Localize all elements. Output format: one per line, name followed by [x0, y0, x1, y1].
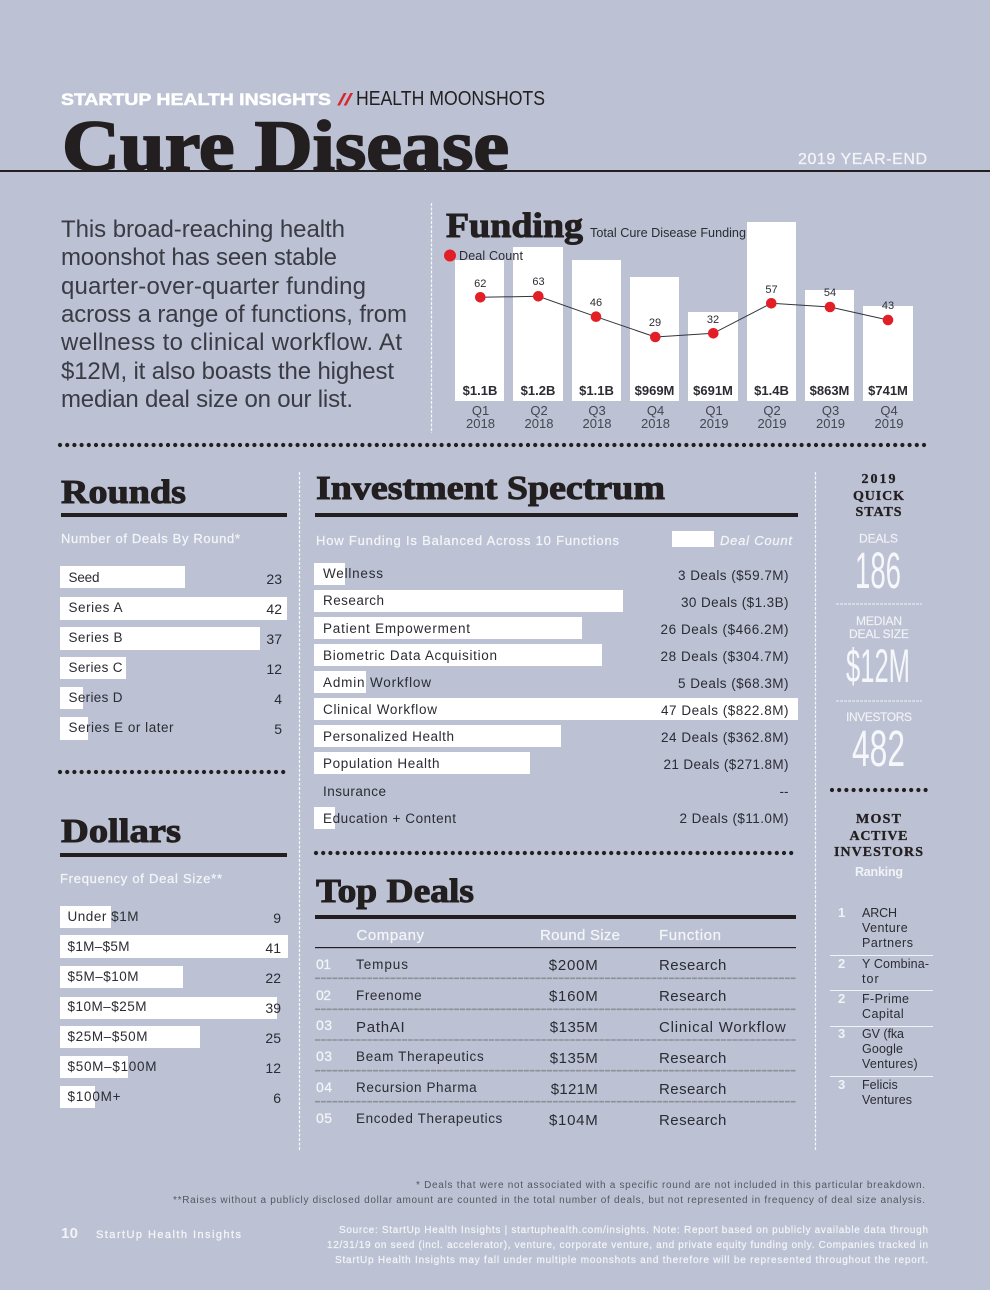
bar: $100m+: [60, 1086, 281, 1108]
quarter axis: 2019: [875, 416, 903, 431]
investor 2: tor: [862, 972, 879, 986]
header: [61, 88, 927, 186]
row: education + content: Education + Content: [323, 811, 456, 826]
deal count labels: 62: [474, 278, 486, 290]
deal count labels: 57: [765, 284, 778, 296]
rounds heading: Rounds: [61, 474, 186, 511]
row: population health: Population Health: [323, 756, 440, 771]
investor 4: GV (fka: [862, 1027, 904, 1041]
bar: series b: [60, 627, 282, 650]
investors heading: [834, 812, 923, 860]
investor 3: 2: [838, 991, 845, 1006]
legend: deal count: Deal Count: [459, 249, 524, 263]
bar: $100m+: $100M+: [68, 1089, 121, 1104]
row: clinical workflow: Clinical Workflow: [323, 702, 437, 717]
bar: series d: Series D: [68, 690, 123, 705]
funding values: [463, 383, 908, 398]
year label: 2019 YEAR-END: [798, 151, 927, 168]
bar: series a: Series A: [68, 600, 122, 615]
quarter axis: Q3: [588, 403, 606, 418]
stat: median deal size: DEAL SIZE: [849, 627, 909, 641]
intro text: quarter-over-quarter funding: [61, 273, 366, 300]
deal 02: 02: [316, 987, 331, 1003]
quarter axis: 2019: [700, 416, 728, 431]
row: insurance: [323, 784, 788, 799]
bar: series d: 4: [274, 691, 282, 707]
deal 03 beam: [316, 1048, 726, 1067]
investors heading: INVESTORS: [834, 845, 923, 860]
row: population health: 21 Deals ($271.8M): [664, 757, 788, 772]
deal 04: [316, 1079, 726, 1098]
investor 1: [838, 905, 913, 950]
deal 03 beam: $135M: [550, 1050, 598, 1067]
panel: funding: [444, 206, 913, 431]
investor 5: Felicis: [862, 1078, 898, 1092]
row: personalized health: Personalized Health: [323, 729, 454, 744]
footnotes: **Raises without a publicly disclosed dollar amount are counted in the total number of deals, but not represented in frequency of deal size analysis.: [173, 1195, 925, 1206]
quarter axis: 2018: [525, 416, 553, 431]
stat: deals: [855, 532, 901, 599]
quick stats heading: 2019: [862, 472, 896, 487]
table header: Round Size: [540, 927, 620, 944]
row: education + content: 2 Deals ($11.0M): [680, 811, 788, 826]
deal count labels: 46: [590, 297, 602, 309]
investor 2: 2: [838, 956, 845, 971]
bar: $5m-$10m: 22: [265, 970, 281, 986]
top deals heading: Top Deals: [316, 873, 474, 910]
funding values: $969M: [635, 383, 674, 398]
spectrum subtitle: How Funding Is Balanced Across 10 Functions: [316, 533, 620, 548]
funding values: $691M: [693, 383, 733, 398]
deal count labels: [474, 276, 894, 329]
panel: rounds: [60, 474, 287, 740]
deal 03 pathai: [316, 1017, 786, 1036]
deal 03 pathai: 03: [316, 1017, 332, 1033]
bar: seed: 23: [266, 571, 282, 587]
row: education + content: [314, 807, 788, 829]
bar: $10m-$25m: [60, 997, 281, 1019]
intro text: across a range of functions, from: [61, 301, 407, 328]
row: biometric data acquisition: Biometric Data Acquisition: [323, 648, 497, 663]
table header: [356, 927, 721, 944]
quarter axis: Q4: [647, 403, 664, 418]
bar: series c: [60, 657, 282, 679]
bar: $10m-$25m: 39: [265, 1000, 281, 1016]
bar: $50m-$100m: [60, 1056, 281, 1078]
deal count line: [475, 291, 893, 342]
source note: Source: StartUp Health Insights | startuphealth.com/insights. Note: Report based on publicly available data through: [339, 1225, 928, 1236]
panel: most active investors: [830, 812, 933, 1107]
kicker: //: [337, 90, 354, 109]
intro text: This broad-reaching health: [61, 216, 345, 243]
row: wellness: 3 Deals ($59.7M): [678, 568, 788, 583]
deal 03 beam: Beam Therapeutics: [356, 1049, 484, 1064]
kicker: STARTUP HEALTH INSIGHTS: [61, 90, 331, 109]
deal 05: [316, 1110, 726, 1129]
row: admin workflow: 5 Deals ($68.3M): [678, 676, 788, 691]
spectrum legend: Deal Count: [720, 533, 793, 548]
bar: seed: [60, 566, 282, 588]
quarter axis: 2019: [816, 416, 845, 431]
row: patient empowerment: [314, 617, 788, 639]
bar: $1m-$5m: $1M–$5M: [68, 939, 130, 954]
deal 04: $121M: [551, 1081, 598, 1098]
deal 05: Encoded Therapeutics: [356, 1111, 503, 1126]
bar: series b: Series B: [68, 630, 122, 645]
panel: dollars: [60, 813, 288, 1108]
footnotes: * Deals that were not associated with a specific round are not included in this particular breakdown.: [416, 1180, 925, 1191]
intro text: median deal size on our list.: [61, 386, 353, 413]
investor 3: Capital: [862, 1007, 904, 1021]
source note: 12/31/19 on seed (incl. accelerator), venture, corporate venture, and private equity funding only. Companies tracked in: [327, 1240, 928, 1251]
quarter axis: 2018: [583, 416, 611, 431]
row: clinical workflow: 47 Deals ($822.8M): [661, 703, 788, 718]
funding heading: Funding: [446, 206, 584, 245]
stat: investors: [846, 710, 912, 777]
intro text: $12M, it also boasts the highest: [61, 358, 394, 385]
investor 1: Partners: [862, 936, 913, 950]
panel: quick stats: [836, 472, 922, 777]
investor 4: Ventures): [862, 1057, 918, 1071]
deal 04: Research: [659, 1081, 726, 1098]
deal 01: [316, 956, 726, 974]
deal count labels: 54: [824, 287, 836, 299]
deal 01: 01: [316, 956, 331, 972]
deal count labels: 43: [882, 300, 894, 312]
row: wellness: [314, 563, 788, 585]
row: patient empowerment: 26 Deals ($466.2M): [660, 622, 788, 637]
rounds subtitle: Number of Deals By Round*: [61, 531, 240, 546]
investor 3: F-Prime: [862, 992, 909, 1006]
investor 2: Y Combina-: [862, 957, 929, 971]
bar: seed: Seed: [68, 570, 100, 585]
bar: $25m-$50m: 25: [265, 1030, 281, 1046]
quarter axis: 2019: [758, 416, 786, 431]
intro text: [60, 216, 407, 413]
deal 01: Research: [659, 957, 726, 974]
deal 03 pathai: Clinical Workflow: [659, 1019, 786, 1036]
bar: $50m-$100m: $50M–$100M: [68, 1059, 156, 1074]
row: insurance: --: [780, 784, 788, 799]
deal 03 pathai: PathAI: [356, 1019, 405, 1036]
intro text: moonshot has seen stable: [61, 244, 337, 271]
ranking label: Ranking: [855, 865, 903, 879]
bar: series c: Series C: [68, 660, 123, 675]
row: biometric data acquisition: 28 Deals ($304.7M): [660, 649, 788, 664]
investor 4: [838, 1026, 918, 1071]
deal 01: $200M: [549, 957, 598, 974]
table header: Company: [356, 927, 424, 944]
deal 02: [316, 987, 726, 1005]
intro text: wellness to clinical workflow. At: [60, 329, 402, 356]
bar: series e or later: [60, 717, 282, 740]
bar: under $1m: Under $1M: [68, 909, 138, 924]
investor 5: 3: [838, 1077, 845, 1092]
bar: $10m-$25m: $10M–$25M: [68, 999, 146, 1014]
deal 02: $160M: [549, 988, 598, 1005]
row: biometric data acquisition: [314, 644, 788, 666]
stat: median deal size: $12M: [846, 639, 910, 692]
bar: series d: [60, 687, 282, 709]
investor 5: [838, 1077, 912, 1107]
page number: StartUp Health Insights: [96, 1229, 242, 1241]
stat: investors: 482: [852, 720, 905, 777]
stat: deals: 186: [855, 542, 901, 599]
quick stats heading: [853, 472, 904, 520]
bar: $1m-$5m: [60, 935, 288, 958]
deal 04: 04: [316, 1079, 332, 1095]
funding values: $1.4B: [754, 383, 789, 398]
quarter axis: [466, 403, 903, 431]
bar: $5m-$10m: $5M–$10M: [68, 969, 138, 984]
quick stats heading: QUICK: [853, 489, 904, 504]
bar: under $1m: [60, 906, 281, 928]
row: personalized health: 24 Deals ($362.8M): [661, 730, 788, 745]
quarter axis: 2018: [641, 416, 670, 431]
bar: series e or later: Series E or later: [68, 720, 174, 735]
deal 02: Freenome: [356, 988, 422, 1003]
spectrum legend: [672, 531, 793, 548]
quarter axis: 2018: [466, 416, 495, 431]
row: research: 30 Deals ($1.3B): [681, 595, 788, 610]
bar: series b: 37: [266, 631, 282, 647]
bar: series a: 42: [266, 601, 282, 617]
row: admin workflow: [314, 671, 788, 693]
stat: median deal size: [846, 614, 910, 692]
investor 3: [838, 991, 909, 1021]
funding values: $1.2B: [521, 383, 555, 398]
quarter axis: Q1: [472, 403, 489, 418]
deal 02: Research: [659, 988, 726, 1005]
kicker: [61, 88, 545, 110]
deal 05: Research: [659, 1112, 726, 1129]
bar: series c: 12: [266, 661, 282, 677]
bar: $1m-$5m: 41: [265, 940, 281, 956]
funding values: $1.1B: [463, 383, 497, 398]
investor 2: [838, 956, 929, 986]
bar: series e or later: 5: [274, 721, 282, 737]
deal 03 beam: 03: [316, 1048, 332, 1064]
page number: [61, 1225, 242, 1242]
row: research: Research: [323, 593, 384, 608]
quarter axis: Q2: [763, 403, 781, 418]
quarter axis: Q1: [705, 403, 723, 418]
kicker: HEALTH MOONSHOTS: [356, 88, 545, 110]
dollars heading: Dollars: [61, 813, 181, 850]
row: personalized health: [314, 725, 788, 747]
investor 1: 1: [838, 905, 845, 920]
deal 03 pathai: $135M: [550, 1019, 598, 1036]
funding subtitle: Total Cure Disease Funding: [590, 226, 746, 240]
page number: 10: [61, 1225, 78, 1242]
row: research: [314, 590, 788, 612]
source note: [327, 1225, 928, 1266]
row: clinical workflow: [314, 698, 798, 720]
stat: investors: INVESTORS: [846, 710, 912, 724]
investor 4: 3: [838, 1026, 845, 1041]
deal count labels: 63: [532, 276, 545, 288]
bar: $100m+: 6: [273, 1090, 281, 1106]
stat: deals: DEALS: [859, 532, 898, 546]
investor 1: ARCH: [862, 906, 897, 920]
bar: $25m-$50m: [60, 1026, 281, 1048]
quick stats heading: STATS: [856, 505, 902, 520]
row: wellness: Wellness: [323, 566, 383, 581]
deal count labels: 29: [649, 317, 661, 329]
deal 05: 05: [316, 1110, 332, 1126]
investor 5: Ventures: [862, 1093, 912, 1107]
stat: median deal size: MEDIAN: [856, 614, 902, 628]
deal 01: Tempus: [356, 957, 408, 972]
bar: $50m-$100m: 12: [265, 1060, 281, 1076]
footnotes: [173, 1180, 925, 1206]
panel: investment spectrum: [314, 470, 798, 829]
investor 4: Google: [862, 1042, 903, 1056]
quarter axis: Q3: [822, 403, 839, 418]
dollars subtitle: Frequency of Deal Size**: [60, 871, 222, 886]
investors heading: MOST: [856, 812, 902, 827]
bar: $25m-$50m: $25M–$50M: [68, 1029, 148, 1044]
deal 04: Recursion Pharma: [356, 1080, 477, 1095]
deal 05: $104M: [549, 1112, 598, 1129]
row: insurance: Insurance: [323, 784, 386, 799]
row: patient empowerment: Patient Empowerment: [323, 621, 470, 636]
deal count labels: 32: [707, 314, 719, 326]
source note: StartUp Health Insights may fall under multiple moonshots and therefore will be represented throughout the report.: [335, 1255, 928, 1266]
panel: top deals: [315, 873, 796, 1129]
deal 03 beam: Research: [659, 1050, 726, 1067]
bar: $5m-$10m: [60, 966, 281, 988]
row: admin workflow: Admin Workflow: [323, 675, 431, 690]
quarter axis: Q4: [880, 403, 898, 418]
spectrum heading: Investment Spectrum: [316, 470, 665, 507]
funding values: $741M: [868, 383, 908, 398]
bar: series a: [60, 597, 287, 620]
table header: Function: [659, 927, 721, 944]
bar: under $1m: 9: [273, 910, 281, 926]
funding values: $1.1B: [579, 383, 614, 398]
funding values: $863M: [810, 383, 849, 398]
row: population health: [314, 752, 788, 774]
funding bars: [455, 222, 913, 401]
quarter axis: Q2: [530, 403, 548, 418]
investor 1: Venture: [862, 921, 908, 935]
investors heading: ACTIVE: [850, 829, 908, 844]
title: Cure Disease: [62, 106, 509, 186]
